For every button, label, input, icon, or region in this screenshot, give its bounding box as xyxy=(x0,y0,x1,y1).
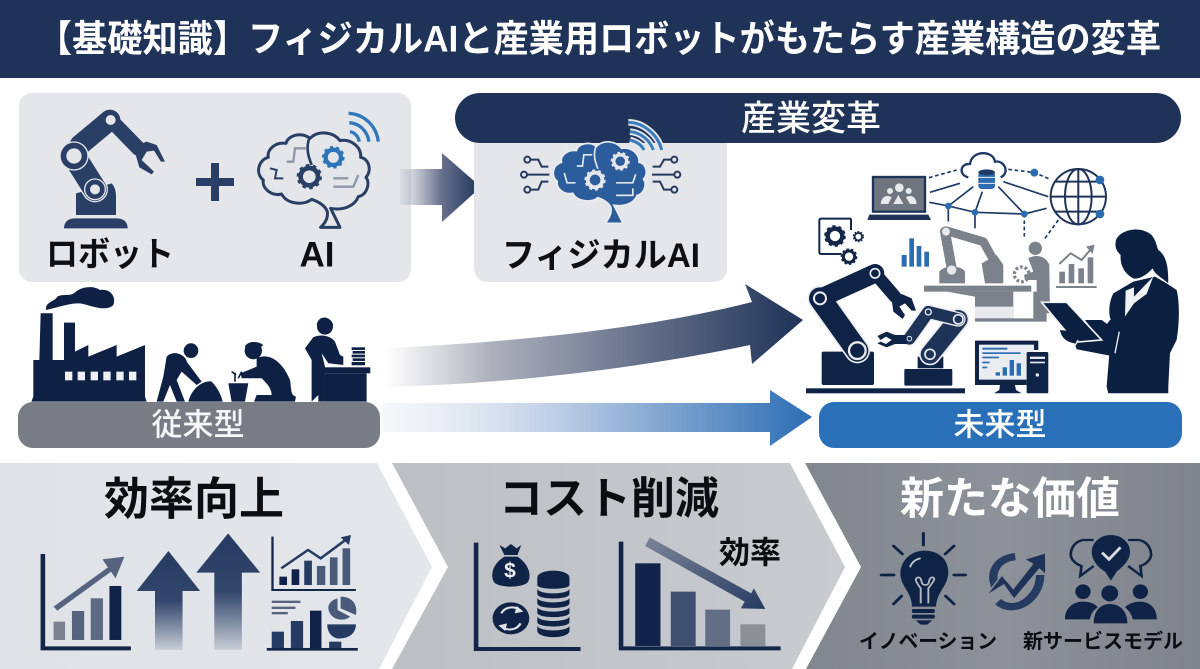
icon: robot arm large xyxy=(806,269,965,393)
arrow: to physical AI xyxy=(400,153,481,222)
heading: efficiency: 効率向上 xyxy=(104,474,284,524)
icon: up arrows xyxy=(137,533,260,650)
panel: efficiency improvement xyxy=(0,463,432,669)
icon: grey robot workstation xyxy=(924,228,1050,322)
icon: blue bars xyxy=(902,238,929,267)
label text: 未来型 xyxy=(954,408,1046,442)
chart: rising bars xyxy=(43,554,131,648)
label: efficiency: 効率 xyxy=(719,536,781,570)
icon: businesswoman with tablet xyxy=(1042,230,1179,393)
icon: grey chart xyxy=(1056,245,1097,288)
panel: robot plus AI xyxy=(19,93,411,282)
title band xyxy=(0,0,1200,78)
heading: cost reduction: コスト削減 xyxy=(499,474,719,524)
icon: light bulb xyxy=(881,533,965,625)
icon: desktop computer xyxy=(975,341,1048,393)
icon: robot arm xyxy=(60,111,165,228)
chart: trend line bars xyxy=(272,535,356,590)
chart: report dashboard xyxy=(267,597,358,651)
icon: laptop xyxy=(867,177,931,220)
label: AI: AI xyxy=(300,236,334,274)
icon: factory xyxy=(31,287,147,402)
icon: people with speech bubbles xyxy=(1065,535,1157,623)
label: innovation: イノベーション xyxy=(859,631,997,653)
future factory scene xyxy=(806,153,1182,448)
icon: manual workers xyxy=(157,317,370,402)
title: 【基礎知識】フィジカルAIと産業用ロボットがもたらす産業構造の変革 xyxy=(37,18,1161,60)
panel: cost reduction xyxy=(392,463,845,669)
chart: falling cost bars xyxy=(621,537,781,648)
arrow: traditional to future lower xyxy=(382,390,812,446)
label text: 従来型 xyxy=(152,408,244,442)
panel: physical AI xyxy=(455,93,1181,282)
icon: plus xyxy=(196,163,234,201)
icon: AI brain xyxy=(259,113,378,227)
label: robot: ロボット xyxy=(46,236,174,274)
label bar: traditional xyxy=(18,402,380,448)
panel: new value xyxy=(805,463,1200,669)
heading: new value: 新たな価値 xyxy=(900,474,1120,524)
icon: network xyxy=(929,153,1058,238)
traditional factory scene xyxy=(18,287,380,448)
icon: physical AI brain xyxy=(521,122,680,223)
icon: money and coins xyxy=(476,543,581,649)
arrow: traditional to future upper xyxy=(385,284,803,387)
icon: robot arm small xyxy=(877,309,963,386)
icon: globe xyxy=(1051,169,1106,224)
label bar: future xyxy=(819,402,1182,448)
icon: gears document xyxy=(819,219,863,264)
label: physical AI: フィジカルAI xyxy=(502,237,700,275)
label: new service model: 新サービスモデル xyxy=(1023,629,1183,653)
icon: growth arrow circle xyxy=(986,553,1046,607)
banner text: 産業変革 xyxy=(741,100,881,138)
dollar sign: $ xyxy=(504,560,516,582)
banner: industrial transformation xyxy=(455,93,1181,143)
